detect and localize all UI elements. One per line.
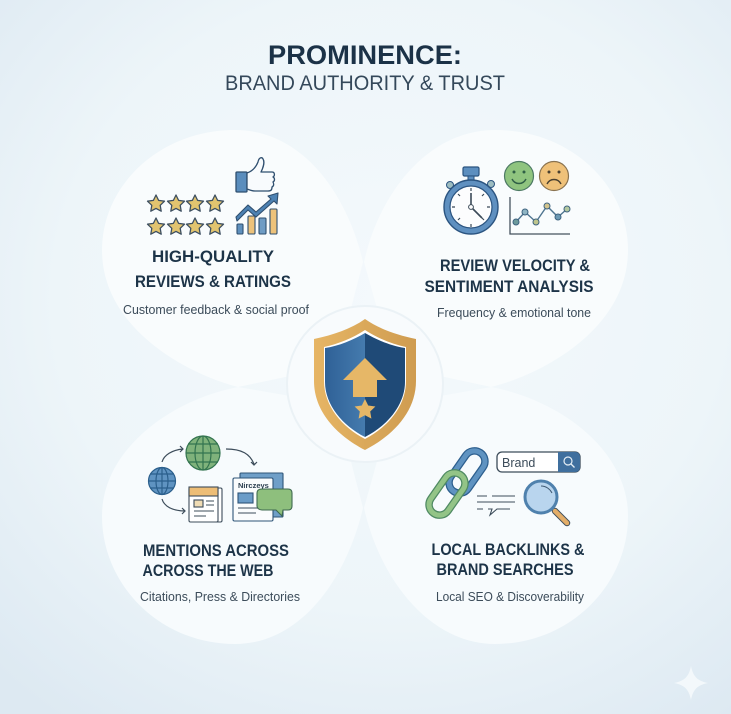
heading: velocity: REVIEW VELOCITY & bbox=[440, 257, 590, 275]
icon: happy face bbox=[504, 162, 534, 190]
heading: reviews line 2: REVIEWS & RATINGS bbox=[135, 273, 291, 291]
arrows bbox=[162, 446, 257, 514]
icon: stars bbox=[148, 195, 224, 234]
caption: reviews: Customer feedback & social proof bbox=[123, 303, 310, 317]
icon: sparkle watermark bbox=[674, 666, 708, 700]
search box: Brand bbox=[502, 456, 535, 470]
caption: velocity: Frequency & emotional tone bbox=[437, 306, 591, 320]
caption: mentions: Citations, Press & Directories bbox=[140, 590, 300, 604]
panel: backlinks blob bbox=[364, 387, 628, 644]
panel: high-quality reviews blob bbox=[102, 130, 363, 387]
heading: backlinks: LOCAL BACKLINKS & bbox=[432, 541, 585, 559]
icon: globe blue bbox=[148, 468, 176, 494]
heading: velocity line 2: SENTIMENT ANALYSIS bbox=[424, 278, 594, 296]
icon: speech bubble bbox=[257, 489, 292, 516]
heading: backlinks line 2: BRAND SEARCHES bbox=[436, 561, 574, 579]
icon: growth chart bbox=[236, 193, 278, 234]
heading: mentions: MENTIONS ACROSS bbox=[143, 542, 289, 560]
icon: chain links bbox=[425, 447, 489, 519]
caption: backlinks: Local SEO & Discoverability bbox=[436, 590, 585, 604]
heading: mentions line 2: ACROSS THE WEB bbox=[142, 562, 274, 580]
title bbox=[225, 40, 505, 95]
panel: review velocity blob bbox=[364, 130, 628, 387]
icon: web page bbox=[189, 487, 222, 522]
icon: magnifying glass bbox=[525, 481, 567, 523]
icon: globe green bbox=[186, 436, 220, 470]
icon: text lines with quote bbox=[477, 496, 515, 515]
icon: newspaper bbox=[233, 473, 283, 521]
search box bbox=[497, 452, 580, 472]
icon: thumbs up bbox=[236, 158, 274, 192]
icon: stopwatch bbox=[444, 167, 498, 234]
subtitle: BRAND AUTHORITY & TRUST bbox=[225, 71, 505, 95]
heading: reviews: HIGH-QUALITY bbox=[152, 248, 274, 266]
title: PROMINENCE: bbox=[268, 40, 462, 70]
icon: newspaper: Nirczeys bbox=[238, 481, 269, 490]
icon: sad face bbox=[540, 162, 568, 190]
center circle bbox=[287, 306, 443, 462]
icon: line chart bbox=[510, 197, 570, 234]
panel: mentions blob bbox=[102, 387, 363, 644]
shield bbox=[314, 319, 416, 450]
